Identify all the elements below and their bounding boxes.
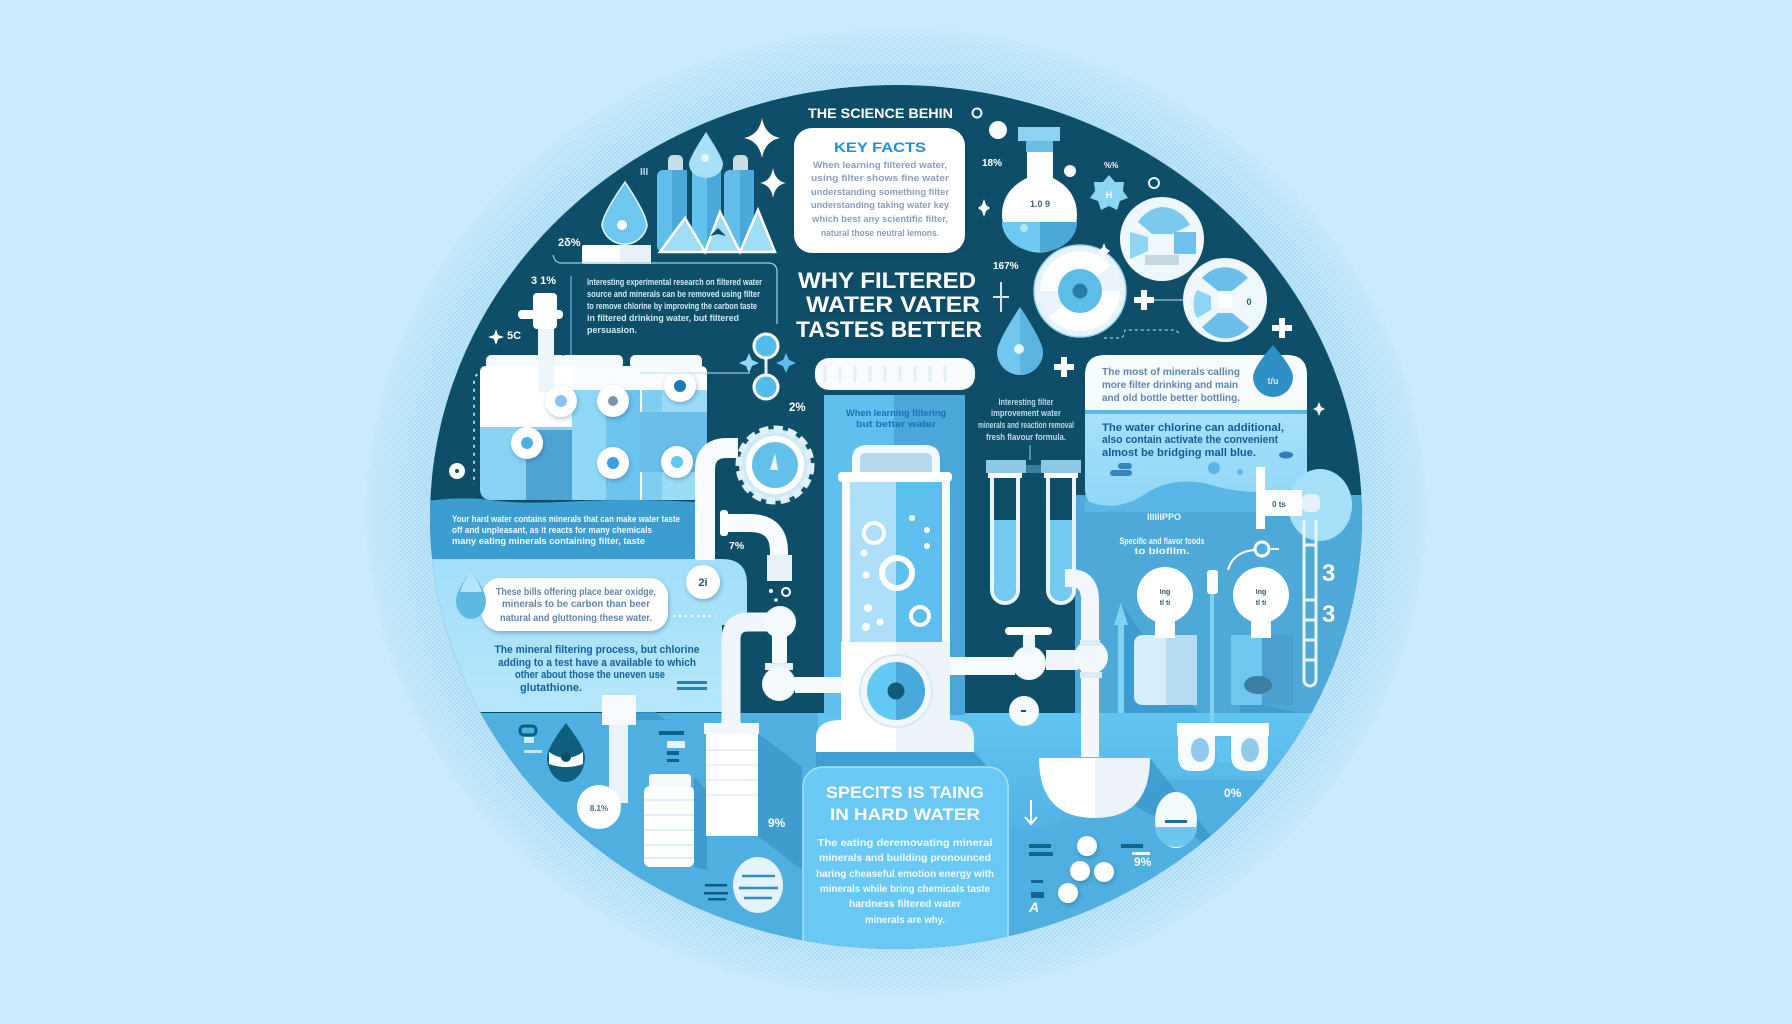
text block: light panel [494, 644, 700, 694]
dial 2 [1120, 197, 1204, 281]
small labels upper left [507, 167, 649, 342]
panel: lower background [480, 713, 1312, 949]
arrow down [1025, 800, 1037, 824]
label: IIIIIIPPO [1147, 512, 1181, 522]
small line [1154, 299, 1185, 301]
text block: light panel: other about those the uneven use [515, 669, 665, 681]
lower right labels: 9% [1134, 855, 1152, 869]
panel: key facts: understanding taking water key [811, 200, 950, 211]
text block: light panel: glutathione. [520, 682, 582, 694]
egg [1155, 792, 1197, 848]
title: TASTES BETTER [796, 317, 982, 342]
panel: specifics: SPECITS IS TAING [826, 783, 984, 802]
tap on tank [518, 293, 563, 392]
small bars [659, 731, 685, 762]
numerals: 3 [1322, 601, 1335, 628]
text block: dark [587, 277, 762, 336]
filter: bubbles [860, 515, 930, 631]
top heading: THE SCIENCE BEHIN [808, 106, 953, 121]
small labels [982, 158, 1118, 272]
title: WATER VATER [806, 292, 980, 317]
main circle [420, 80, 1370, 960]
card: left: minerals to be carbon than beer [502, 599, 650, 610]
text block: left band: Your hard water contains minerals that can make water taste [452, 514, 680, 525]
icon: pedestal drop [582, 182, 651, 264]
panel: specifics: IN HARD WATER [830, 805, 980, 824]
pipe: lower [731, 606, 841, 725]
text block: tubes caption [978, 397, 1074, 442]
title [796, 268, 982, 342]
icon: sparkle small [488, 329, 504, 345]
text block: column: When learning filtering [846, 408, 946, 419]
text block: right panel top: more filter drinking and main [1102, 380, 1238, 391]
ball [1009, 696, 1039, 726]
text block: column [846, 408, 946, 430]
chain circles [640, 334, 796, 400]
icon: sparkles [744, 118, 786, 198]
text block: right panel top: and old bottle better bottling. [1102, 393, 1240, 404]
text block: dark: Interesting experimental research on filtered water [587, 277, 762, 288]
filter: gauge [860, 655, 932, 727]
card: left: These bills offering place bear oxidge, [496, 587, 656, 598]
icon: star badge [1090, 175, 1128, 210]
panel: specifics: minerals while bring chemicals taste [820, 883, 990, 895]
vertical rule [570, 276, 572, 490]
bulb right: Ing [1256, 589, 1266, 596]
brush [1207, 570, 1218, 723]
panel: specifics: minerals and building pronounced [819, 852, 991, 864]
panel: specifics: The eating deremovating mineral [818, 837, 993, 849]
dashed arrow [1104, 330, 1179, 338]
small marks lower [1029, 844, 1150, 898]
text block: right panel lower: almost be bridging mall blue. [1102, 447, 1256, 459]
bulb right: tl ti [1256, 600, 1266, 607]
card: left: natural and gluttoning these water. [500, 613, 652, 624]
shadow shapes [636, 605, 1300, 870]
icon: panel drop [1253, 345, 1293, 397]
small cup icon [520, 726, 542, 753]
central blue column [824, 395, 965, 715]
bulb left: Ing [1160, 589, 1170, 596]
card: left [482, 578, 668, 631]
panel: light lower strip [818, 713, 1311, 802]
icon: striped egg [733, 857, 783, 913]
panel: left mid band [420, 498, 696, 559]
text block: dark: in filtered drinking water, but filtered [587, 313, 739, 324]
tank buttons [511, 370, 696, 479]
text block: light panel: adding to a test have a available to which [498, 657, 696, 669]
small bars [704, 884, 728, 900]
percent label: 9% [768, 816, 786, 830]
icon: dark drop [547, 723, 585, 782]
small sparkles [978, 199, 1325, 416]
balls [989, 121, 1076, 177]
panel: right info panel [1085, 355, 1307, 512]
panel: light left panel [420, 559, 747, 712]
dial 3 [1183, 258, 1267, 342]
text block: dark: persuasion. [587, 325, 637, 336]
pipe nozzle [720, 510, 792, 602]
dial 1 [1034, 245, 1126, 337]
dotted line [474, 362, 488, 485]
text block: right lower: Specific and flavor foods [1120, 536, 1204, 546]
filter: body [815, 358, 975, 752]
holder [1177, 723, 1269, 771]
gear [739, 429, 811, 501]
bent pipe with dial: 8.1% [590, 804, 608, 813]
text block: right panel top [1102, 367, 1240, 404]
panel: specifics: hardness filtered water [849, 898, 961, 910]
icon: big drop [997, 307, 1043, 375]
spike [1114, 603, 1128, 713]
bottle: small [644, 774, 694, 867]
text block: right panel lower: The water chlorine can additional, [1102, 422, 1284, 434]
text block: tubes caption: minerals and reaction removal [978, 420, 1074, 430]
text block: right lower [1120, 536, 1204, 556]
text block: tubes caption: Interesting filter [998, 397, 1054, 407]
small tap: 0 ts [1272, 500, 1286, 509]
icon: panel drop: t/u [1268, 376, 1278, 386]
lower right labels: 0% [1224, 786, 1242, 800]
title: WHY FILTERED [798, 268, 976, 293]
plus signs [993, 282, 1292, 377]
small label: A [1028, 899, 1039, 915]
panel: specifics [803, 767, 1008, 957]
text block: right panel lower [1102, 422, 1284, 459]
text block: right lower: to biofilm. [1134, 546, 1190, 556]
bulb left: tl ti [1160, 600, 1170, 607]
text block: light panel: The mineral filtering process, but chlorine [494, 644, 700, 656]
pipe: upper left [705, 448, 779, 560]
light arc right [1288, 469, 1352, 541]
numerals: 3 [1322, 560, 1335, 587]
white dot [449, 463, 465, 479]
text block: tubes caption: improvement water [991, 408, 1061, 418]
small labels: 18% [982, 158, 1002, 169]
percent label: 7% [729, 540, 745, 552]
button centres [521, 380, 686, 469]
panel: right lower background [1075, 495, 1370, 713]
flask: 1.0 9 [1030, 199, 1050, 209]
text block: left band [452, 514, 680, 547]
small labels: %% [1104, 161, 1118, 170]
small tap [1256, 467, 1320, 529]
panel: specifics: minerals are why. [865, 914, 945, 926]
ring with arc [1228, 542, 1279, 570]
text block: right panel top: The most of minerals calling [1102, 367, 1240, 378]
text block: dark: source and minerals can be removed using filter [587, 289, 760, 300]
text block: dark: to remove chlorine by improving the carbon taste [587, 301, 757, 312]
badge [686, 565, 720, 599]
panel: specifics: haring cheaseful emotion energy with [816, 868, 994, 880]
panel: key facts: When learning filtered water, [813, 160, 947, 171]
dial 3: 0 [1246, 297, 1252, 307]
pipe: right and tap [950, 578, 1108, 757]
dotted connector [673, 615, 716, 617]
panel: key facts: using filter shows fine water [811, 173, 949, 184]
stippled halo [366, 28, 1426, 996]
ring [1149, 178, 1159, 188]
panel: key facts: which best any scientific filter, [811, 214, 948, 225]
small labels: 167% [993, 261, 1019, 272]
text block: left band: many eating minerals containing filter, taste [452, 536, 645, 547]
text block: tubes caption: fresh flavour formula. [986, 432, 1066, 442]
icon: bottles [657, 132, 775, 252]
text block: column: but better water [856, 419, 936, 430]
small labels upper left: 5C [507, 330, 521, 342]
icon: star badge: H [1106, 190, 1112, 200]
ladder tube [1304, 520, 1316, 686]
icon: light drop [456, 572, 486, 619]
percent label: 2% [789, 402, 806, 414]
panel: key facts [794, 128, 965, 253]
small labels upper left: 3 1% [531, 275, 556, 287]
small labels upper left: III [640, 167, 649, 178]
tanks [480, 355, 707, 500]
small labels upper left: 2δ% [558, 237, 581, 249]
text block: right panel lower: also contain activate the convenient [1102, 434, 1278, 446]
bulb right [1231, 567, 1293, 705]
lower right labels [1134, 786, 1242, 869]
bottle: large [704, 723, 759, 836]
text block: left band: off and unpleasant, as it reacts for many chemicals [452, 525, 652, 536]
badge: 2i [698, 577, 708, 589]
panel: key facts: KEY FACTS [834, 140, 926, 155]
panel: key facts: natural those neutral lemons. [821, 228, 939, 239]
basin [1039, 758, 1150, 818]
panel decorations [1110, 452, 1293, 476]
test tubes [986, 445, 1081, 603]
lines [677, 681, 707, 690]
connector line [553, 255, 777, 324]
panel: key facts: understanding something filter [811, 187, 949, 198]
balls [1058, 836, 1114, 903]
bent pipe with dial [577, 695, 636, 829]
numerals [1322, 560, 1335, 628]
bulb left [1134, 567, 1197, 705]
flask [1002, 127, 1077, 253]
